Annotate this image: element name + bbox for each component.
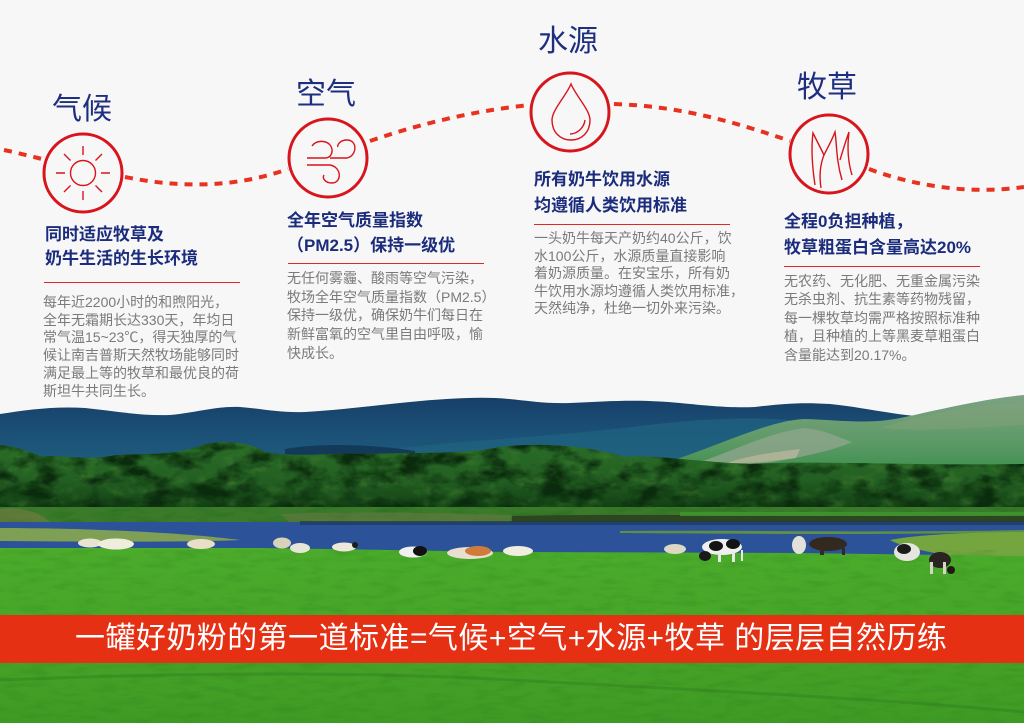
heading: 空气: 空气 (296, 78, 356, 111)
text: 气候 description: 每年近2200小时的和煦阳光， (43, 294, 228, 310)
text: 气候 description (43, 294, 239, 399)
title: 牧草 subtitle: 牧草粗蛋白含量高达20% (784, 238, 971, 257)
text: 空气 description: 牧场全年空气质量指数（PM2.5） (287, 289, 495, 305)
text: 牧草 description: 含量能达到20.17%。 (784, 347, 915, 363)
text: 气候 description: 常气温15~23℃，得天独厚的气 (43, 329, 236, 345)
title: 水源 subtitle: 所有奶牛饮用水源 (534, 170, 670, 189)
text: 水源 description: 天然纯净，杜绝一切外来污染。 (534, 300, 730, 316)
text: 空气 description: 新鲜富氧的空气里自由呼吸，愉 (287, 326, 483, 342)
title: 牧草 subtitle (784, 212, 971, 257)
title: 空气 subtitle: 全年空气质量指数 (287, 211, 423, 230)
grazing cows (78, 536, 955, 574)
river bank (0, 507, 1024, 527)
text: 空气 description (287, 270, 495, 361)
banner (0, 615, 1024, 663)
far mountains (0, 398, 915, 470)
text: 水源 description: 水100公斤，水源质量直接影响 (534, 248, 725, 264)
landscape photo (0, 395, 1024, 723)
title: 空气 subtitle: （PM2.5）保持一级优 (287, 236, 455, 255)
text: 牧草 description: 每一棵牧草均需严格按照标准种 (784, 310, 980, 326)
text: 牧草 description: 植，且种植的上等黑麦草粗蛋白 (784, 328, 980, 344)
text: 牧草 description: 无农药、无化肥、无重金属污染 (784, 273, 980, 289)
text: 空气 description: 无任何雾霾、酸雨等空气污染， (287, 270, 483, 286)
title: 水源 subtitle: 均遵循人类饮用标准 (534, 196, 687, 215)
text: 气候 description: 全年无霜期长达330天，年均日 (43, 312, 234, 328)
heading: 气候: 气候 (52, 93, 112, 126)
text: 牧草 description (784, 273, 980, 363)
title: 气候 subtitle (45, 225, 198, 268)
meadow (0, 548, 1024, 723)
text: 气候 description: 满足最上等的牧草和最优良的荷 (43, 365, 239, 381)
heading: 水源: 水源 (538, 25, 598, 58)
title: 水源 subtitle (534, 170, 687, 215)
text: 空气 description: 保持一级优，确保奶牛们每日在 (287, 307, 483, 323)
heading: 牧草: 牧草 (797, 71, 857, 104)
text: 牧草 description: 无杀虫剂、抗生素等药物残留， (784, 291, 980, 307)
text: 气候 description: 斯坦牛共同生长。 (43, 383, 155, 399)
text: 空气 description: 快成长。 (287, 345, 343, 361)
river (0, 521, 1024, 558)
right green hills (668, 395, 1024, 470)
title: 空气 subtitle (287, 211, 455, 255)
text: 水源 description: 牛饮用水源均遵循人类饮用标准， (534, 283, 744, 299)
title: 气候 subtitle: 同时适应牧草及 (45, 225, 164, 244)
text: 气候 description: 候让南吉普斯天然牧场能够同时 (43, 347, 239, 363)
banner: 一罐好奶粉的第一道标准=气候+空气+水源+牧草 的层层自然历练 (75, 622, 947, 655)
text: 水源 description (534, 230, 744, 316)
title: 气候 subtitle: 奶牛生活的生长环境 (45, 249, 198, 268)
tree line (0, 440, 1024, 512)
title: 牧草 subtitle: 全程0负担种植， (784, 212, 912, 231)
text: 水源 description: 着奶源质量。在安宝乐，所有奶 (534, 265, 730, 281)
text: 水源 description: 一头奶牛每天产奶约40公斤，饮 (534, 230, 732, 246)
